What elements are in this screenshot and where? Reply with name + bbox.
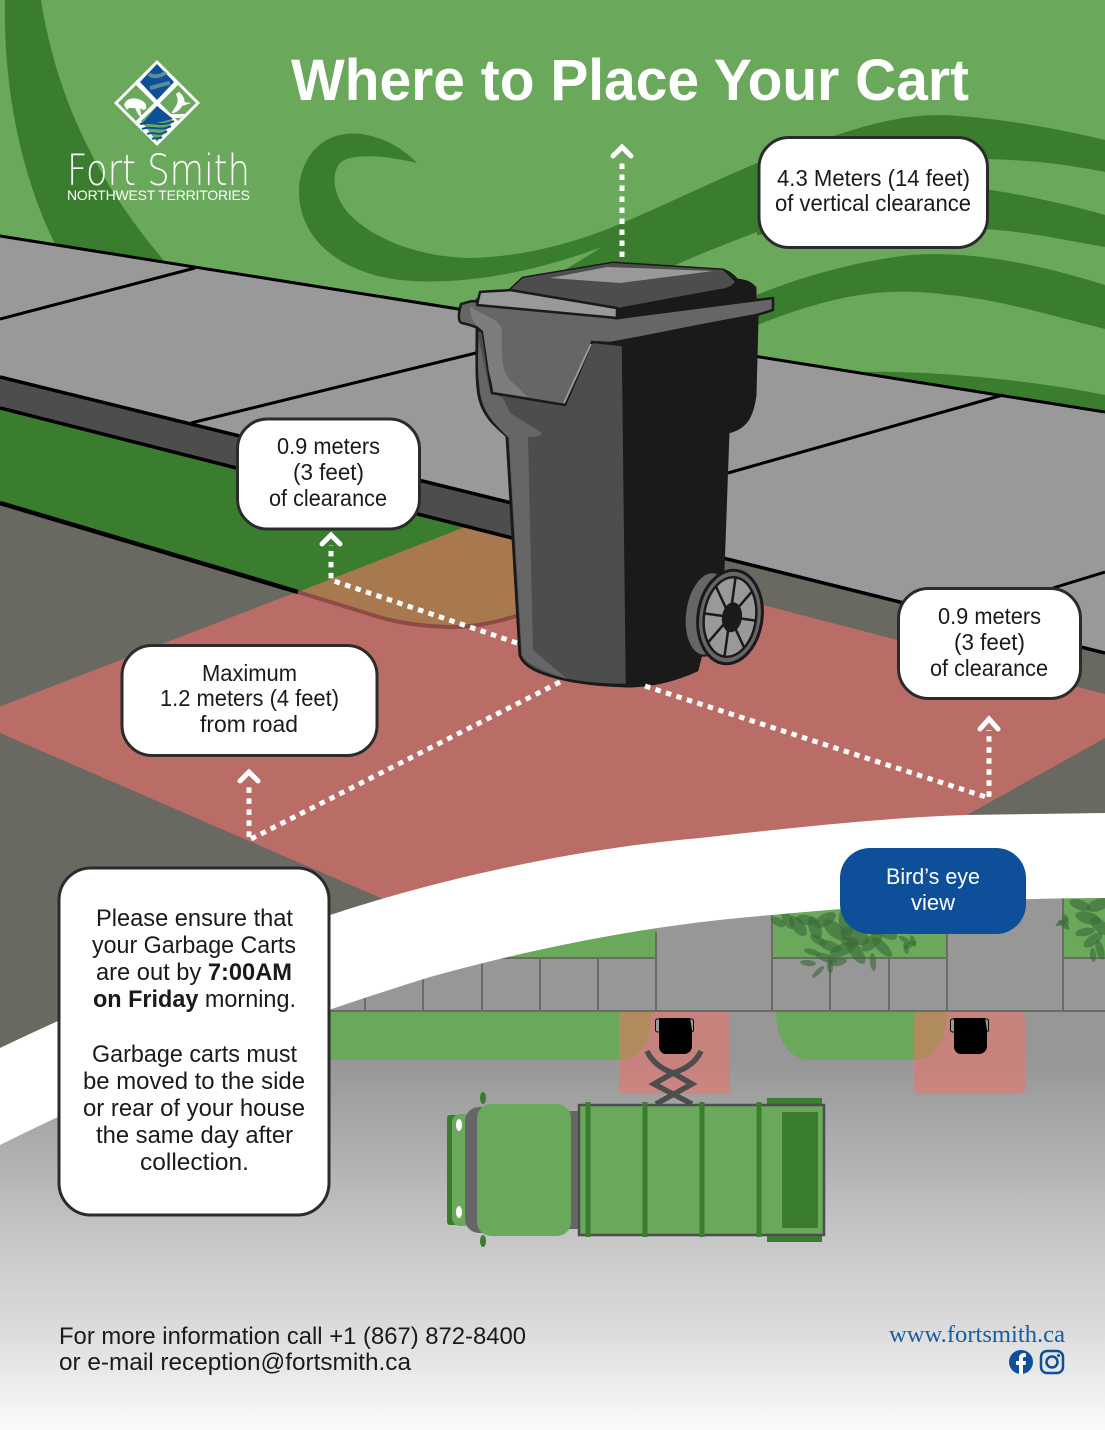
callout: left clearance: 0.9 meters (277, 433, 380, 459)
icon: top-down cart 1 (656, 1018, 694, 1054)
icon: garbage cart (459, 263, 773, 686)
callout: maximum distance from road: Maximum (202, 660, 297, 686)
panel: collection instructions: be moved to the side (83, 1068, 305, 1095)
panel: collection instructions: the same day after (96, 1122, 293, 1149)
cart wheel (679, 564, 768, 668)
contact information: or e-mail reception@fortsmith.ca (59, 1349, 412, 1376)
icon: instagram (1041, 1351, 1063, 1373)
callout: bird's eye view label: Bird’s eye (886, 864, 980, 889)
cart lid (510, 263, 755, 318)
callout: bird's eye view label: view (911, 890, 956, 915)
logo: Fort Smith: NORTHWEST TERRITORIES (67, 187, 250, 203)
callout: right clearance: 0.9 meters (938, 603, 1041, 629)
callout: right clearance (898, 588, 1080, 698)
panel: bird's eye ground (0, 855, 1105, 1430)
icon: logo diamond (114, 60, 200, 146)
panel: bird's eye street layout (320, 890, 1105, 1094)
callout: bird's eye view label (840, 848, 1026, 934)
panel: collection instructions: or rear of your house (83, 1095, 305, 1122)
white divider band (0, 813, 1105, 1145)
truck lift arm (647, 1051, 701, 1104)
cart body (477, 300, 757, 686)
lower lawns (320, 1012, 947, 1060)
panel: boulevard grass strip (0, 408, 525, 627)
panel: green sky background (0, 0, 1105, 520)
website link: www.fortsmith.ca (889, 1322, 1065, 1348)
callout: maximum distance from road: 1.2 meters (4 feet) (160, 685, 339, 711)
arrow: left clearance (322, 535, 517, 643)
panel: collection instructions: on Friday morning. (93, 986, 296, 1013)
cart rim and handle (459, 298, 773, 405)
upper lawns (330, 890, 1105, 958)
panel: collection instructions: Please ensure that (96, 905, 293, 932)
callout: left clearance (238, 419, 420, 529)
panel: sidewalk (0, 236, 1105, 653)
panel: collection instructions (59, 868, 329, 1215)
logo: Fort Smith (67, 60, 250, 203)
decorative swirls (5, 0, 1105, 415)
panel: curb (0, 377, 1105, 653)
callout: left clearance: (3 feet) (293, 459, 364, 485)
logo: Fort Smith: Fort Smith (67, 146, 250, 196)
callout: maximum distance from road (122, 646, 377, 756)
contact information: For more information call +1 (867) 872-8400 (59, 1323, 526, 1350)
panel: road surface (0, 370, 1105, 1150)
arrow: distance from road (240, 682, 560, 840)
panel: collection instructions: Garbage carts must (92, 1041, 297, 1068)
arrow: vertical clearance (613, 147, 631, 257)
icon: garbage truck top view (447, 1051, 824, 1247)
callout: vertical clearance: of vertical clearance (775, 190, 971, 216)
panel: red placement zone (0, 527, 1105, 915)
icon: top-down cart 2 (950, 1018, 988, 1054)
callout: maximum distance from road: from road (200, 711, 298, 737)
callout: vertical clearance (759, 138, 988, 248)
callout: right clearance: of clearance (930, 655, 1048, 681)
panel: collection instructions: collection. (140, 1149, 249, 1176)
red zone 1 (619, 1012, 730, 1094)
arrow: right clearance (645, 686, 998, 798)
callout: right clearance: (3 feet) (954, 629, 1025, 655)
title: Where to Place Your Cart (291, 48, 969, 113)
tree canopy (769, 895, 1105, 979)
callout: vertical clearance: 4.3 Meters (14 feet) (777, 165, 970, 191)
contact information (59, 1323, 526, 1376)
sidewalk tiles (330, 890, 1105, 1011)
icon: facebook (1009, 1350, 1033, 1374)
callout: left clearance: of clearance (269, 485, 387, 511)
red zone 2 (914, 1012, 1025, 1094)
panel: collection instructions: are out by 7:00AM (96, 959, 292, 986)
panel: collection instructions: your Garbage Carts (92, 932, 296, 959)
